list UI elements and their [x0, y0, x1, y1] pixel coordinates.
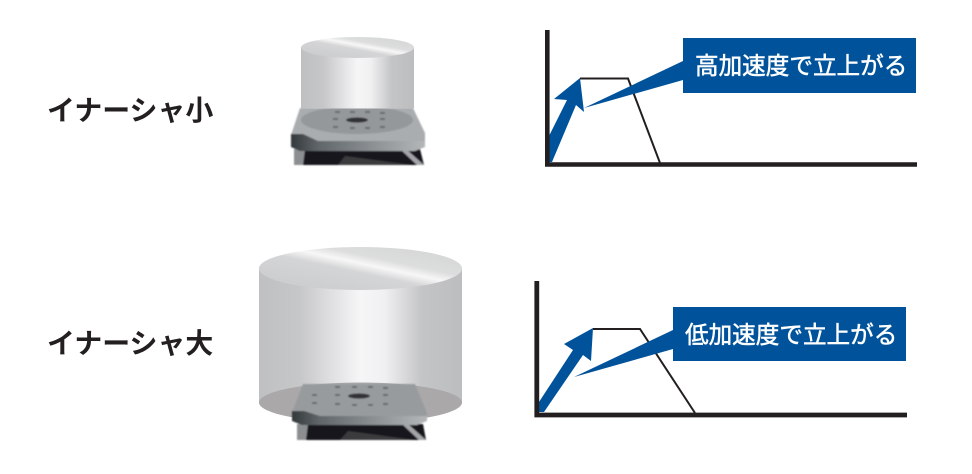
arrow: acceleration ramp [539, 328, 593, 412]
callout: low acceleration: 低加速度で立上がる [685, 322, 897, 349]
arrow: acceleration ramp [547, 78, 584, 162]
label: large inertia: イナーシャ大 [47, 328, 213, 359]
cylinder: small inertia [301, 37, 414, 108]
rotary table photo: large inertia [292, 384, 427, 440]
axes [537, 281, 907, 415]
callout pointer [574, 330, 673, 377]
axes [547, 30, 917, 164]
callout: low acceleration [673, 307, 906, 361]
cylinder base: large inertia [259, 247, 462, 422]
chart: high acceleration [547, 30, 917, 164]
callout pointer [584, 61, 683, 108]
velocity profile line [580, 78, 660, 163]
callout: high acceleration: 高加速度で立上がる [695, 53, 907, 80]
label: small inertia: イナーシャ小 [47, 95, 213, 126]
chart: low acceleration [537, 281, 907, 415]
velocity profile line [593, 329, 695, 413]
callout: high acceleration [683, 38, 916, 93]
rotary table photo: small inertia [291, 106, 425, 165]
